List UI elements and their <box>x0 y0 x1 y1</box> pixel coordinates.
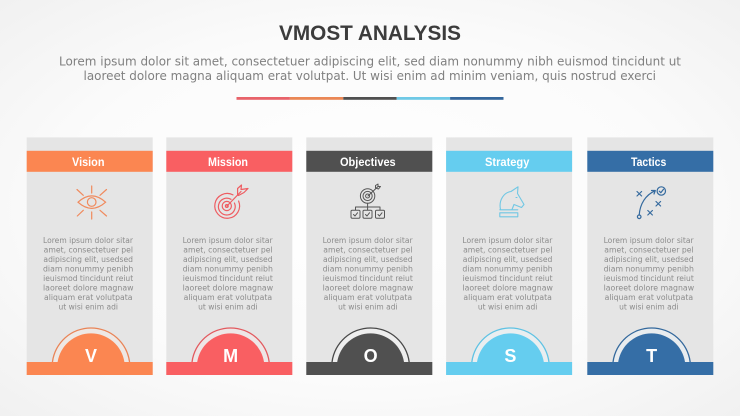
card background <box>166 137 292 375</box>
icon: eye <box>77 186 106 219</box>
semicircle badge: T: T <box>646 346 657 366</box>
header bar: Strategy <box>446 151 572 172</box>
body text: laoreet dolore magnaw <box>43 284 134 293</box>
body text: adipiscing elit, usedsed <box>463 255 553 264</box>
header bar: Strategy: Strategy <box>485 155 530 169</box>
body text: adipiscing elit, usedsed <box>604 255 694 264</box>
panel: Strategy <box>446 137 572 375</box>
body text: laoreet dolore magnaw <box>183 284 273 293</box>
body text: diam nonummy penibh <box>462 265 553 274</box>
body text: ut wisi enim adi <box>619 302 679 311</box>
body text: diam nonummy penibh <box>43 265 134 274</box>
panel: Objectives <box>306 137 432 375</box>
body text: diam nonummy penibh <box>323 265 413 274</box>
panel: Mission <box>166 137 292 375</box>
body text: aliquam erat volutpata <box>605 293 693 302</box>
body text: ieuismod tincidunt reiut <box>604 274 694 283</box>
body text: ieuismod tincidunt reiut <box>463 274 553 283</box>
body text: amet, consectetuer pel <box>604 246 694 255</box>
card background <box>587 137 713 375</box>
body text: diam nonummy penibh <box>604 265 694 274</box>
body text: ut wisi enim adi <box>338 302 398 311</box>
card background <box>27 137 153 375</box>
semicircle badge: S <box>446 327 572 375</box>
semicircle badge: V <box>27 327 153 375</box>
body text: ieuismod tincidunt reiut <box>183 274 273 283</box>
body text: laoreet dolore magnaw <box>604 284 694 293</box>
header bar: Tactics <box>587 151 713 172</box>
body text: adipiscing elit, usedsed <box>183 255 273 264</box>
semicircle badge: S: S <box>504 346 516 366</box>
icon: target over checklist hierarchy <box>351 184 384 218</box>
header bar: Mission: Mission <box>208 155 248 169</box>
header bar: Tactics: Tactics <box>631 155 667 169</box>
body text <box>183 236 274 311</box>
body text: ieuismod tincidunt reiut <box>43 274 133 283</box>
body text: amet, consectetuer pel <box>323 246 413 255</box>
body text: aliquam erat volutpata <box>44 293 132 302</box>
body text: ieuismod tincidunt reiut <box>323 274 413 283</box>
body text <box>323 236 414 311</box>
semicircle badge: O: O <box>364 346 378 366</box>
multicolor divider <box>236 97 504 100</box>
header bar: Objectives: Objectives <box>340 155 396 169</box>
subtitle text block <box>59 54 681 83</box>
body text: aliquam erat volutpata <box>324 293 412 302</box>
subtitle text block: Lorem ipsum dolor sit amet, consectetuer adipiscing elit, sed diam nonummy nibh euismod tincidunt ut <box>59 54 681 68</box>
body text <box>604 236 695 311</box>
body text <box>462 236 553 311</box>
panel: Vision <box>27 137 153 375</box>
header bar: Mission <box>166 151 292 172</box>
card background <box>306 137 432 375</box>
body text: laoreet dolore magnaw <box>462 284 553 293</box>
body text: laoreet dolore magnaw <box>323 284 413 293</box>
header bar: Objectives <box>306 151 432 172</box>
body text: diam nonummy penibh <box>183 265 273 274</box>
body text: ut wisi enim adi <box>478 302 537 311</box>
card background <box>446 137 572 375</box>
body text <box>43 236 134 311</box>
body text: aliquam erat volutpata <box>463 293 552 302</box>
body text: ut wisi enim adi <box>198 302 258 311</box>
semicircle badge: V: V <box>85 346 97 366</box>
header bar: Vision: Vision <box>72 155 104 169</box>
body text: aliquam erat volutpata <box>184 293 272 302</box>
subtitle text block: laoreet dolore magna aliquam erat volutpat. Ut wisi enim ad minim veniam, quis nostrud exerci <box>84 68 656 83</box>
body text: amet, consectetuer pel <box>183 246 273 255</box>
body text: adipiscing elit, usedsed <box>323 255 413 264</box>
body text: Lorem ipsum dolor sitar <box>323 236 414 245</box>
icon: chess knight <box>500 187 524 217</box>
body text: Lorem ipsum dolor sitar <box>43 236 134 245</box>
title: VMOST ANALYSIS <box>279 22 461 45</box>
semicircle badge: O <box>306 327 432 375</box>
icon: target with arrow <box>215 185 248 218</box>
semicircle badge: M: M <box>223 346 238 366</box>
body text: Lorem ipsum dolor sitar <box>462 236 553 245</box>
body text: amet, consectetuer pel <box>44 246 133 255</box>
header bar: Vision <box>27 151 153 172</box>
body text: Lorem ipsum dolor sitar <box>183 236 274 245</box>
body text: adipiscing elit, usedsed <box>43 255 133 264</box>
body text: amet, consectetuer pel <box>463 246 552 255</box>
semicircle badge: T <box>587 327 713 375</box>
body text: ut wisi enim adi <box>58 302 118 311</box>
icon: tactics play diagram <box>637 187 666 219</box>
semicircle badge: M <box>166 327 292 375</box>
panel: Tactics <box>587 137 713 375</box>
body text: Lorem ipsum dolor sitar <box>604 236 695 245</box>
